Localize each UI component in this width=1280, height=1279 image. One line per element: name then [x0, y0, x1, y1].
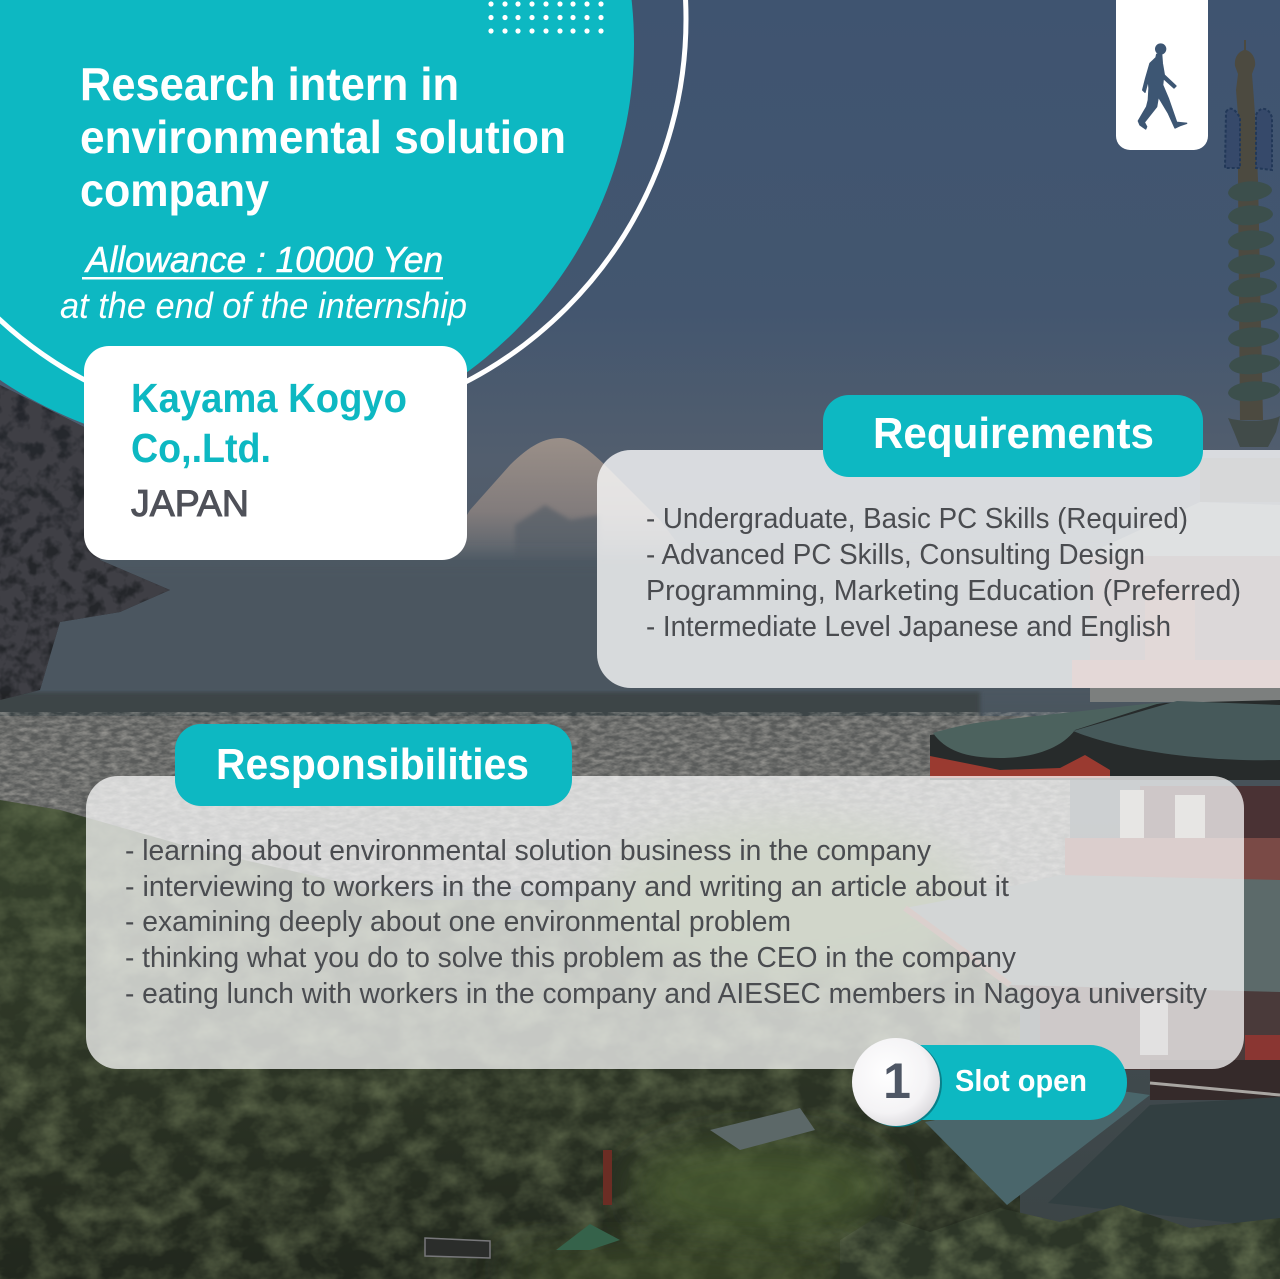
- distant forest band: [0, 692, 980, 722]
- title: environmental solution: [80, 111, 566, 163]
- requirements heading: Requirements: [873, 409, 1154, 458]
- company name: [131, 375, 407, 471]
- requirements list: - Advanced PC Skills, Consulting Design: [646, 539, 1145, 571]
- requirements list: [646, 503, 1241, 643]
- requirements heading: [823, 395, 1203, 477]
- responsibilities list: [125, 835, 1207, 1010]
- icon: walking person: [1138, 44, 1187, 129]
- responsibilities list: - examining deeply about one environmental problem: [125, 906, 791, 938]
- decorative dot grid: [488, 1, 604, 34]
- responsibilities list: - eating lunch with workers in the company and AIESEC members in Nagoya university: [125, 978, 1207, 1010]
- responsibilities list: - learning about environmental solution business in the company: [125, 835, 931, 867]
- responsibilities list: - thinking what you do to solve this problem as the CEO in the company: [125, 942, 1016, 974]
- company card: [84, 346, 467, 560]
- pagoda: [840, 590, 1280, 1279]
- teal title circle: [0, 0, 634, 450]
- title: company: [80, 164, 269, 216]
- spire of the pagoda: [1225, 40, 1280, 447]
- mount fuji: [440, 438, 690, 560]
- company name: Kayama Kogyo: [131, 375, 407, 421]
- requirements list: - Intermediate Level Japanese and English: [646, 611, 1171, 643]
- allowance: at the end of the internship: [60, 285, 467, 326]
- country: JAPAN: [131, 483, 249, 524]
- outer white ring: [0, 0, 686, 428]
- slot badge: [852, 1038, 1127, 1127]
- slot badge: Slot open: [955, 1063, 1087, 1098]
- requirements list: - Undergraduate, Basic PC Skills (Required): [646, 503, 1188, 535]
- panel: requirements: [597, 450, 1280, 688]
- responsibilities heading: [175, 724, 572, 806]
- responsibilities heading: Responsibilities: [216, 740, 529, 789]
- title: [80, 58, 566, 216]
- slot number: 1: [883, 1053, 911, 1109]
- walking figure tab: [1116, 0, 1208, 150]
- responsibilities list: - interviewing to workers in the company and writing an article about it: [125, 871, 1009, 903]
- slot number: [852, 1038, 940, 1126]
- title: Research intern in: [80, 58, 459, 110]
- clouds around the mountain: [0, 558, 1160, 708]
- pine tree: [0, 385, 180, 705]
- company name: Co,.Ltd.: [131, 425, 271, 471]
- front trees: [840, 1200, 1280, 1279]
- requirements list: Programming, Marketing Education (Preferred): [646, 575, 1241, 607]
- foreground trees: [0, 800, 1020, 1279]
- allowance: Allowance : 10000 Yen: [84, 239, 443, 280]
- city: [0, 712, 1070, 892]
- panel: responsibilities: [86, 776, 1244, 1069]
- allowance: [60, 239, 467, 326]
